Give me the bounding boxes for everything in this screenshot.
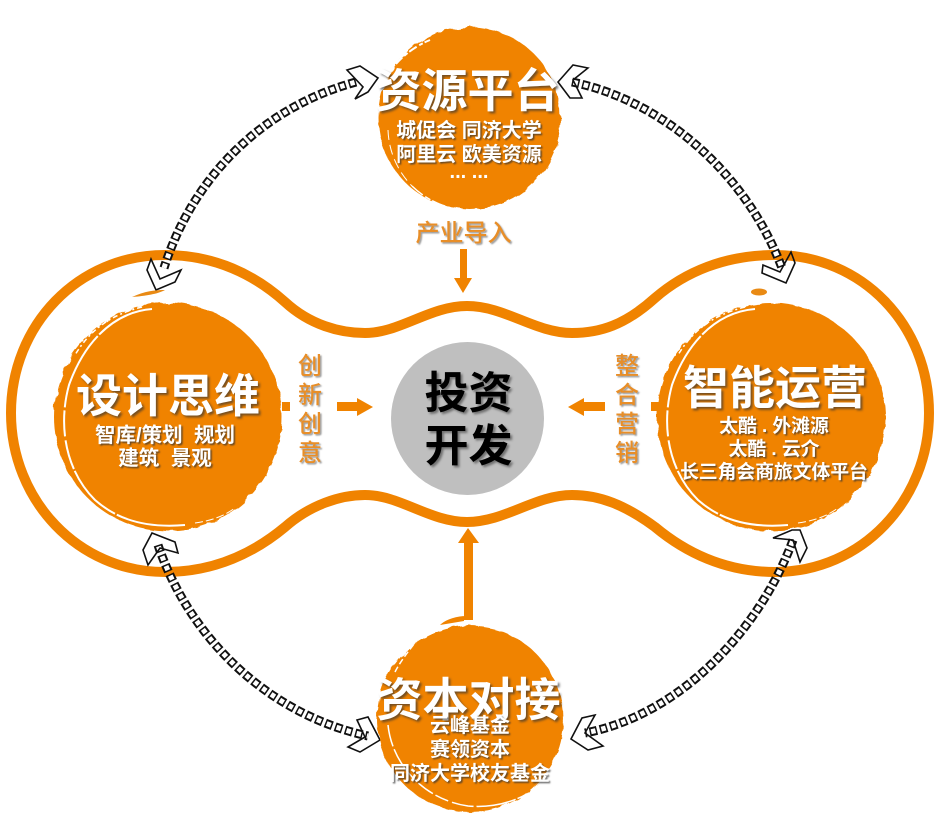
panel: smart operations	[656, 302, 886, 532]
heading: 智能运营	[683, 362, 867, 414]
icon: brush circle	[376, 624, 564, 813]
text: partners: 城促会 同济大学 阿里云 欧美资源	[396, 120, 542, 166]
orange peanut-shaped band	[11, 255, 929, 572]
chain link: top left	[164, 82, 356, 268]
icon: brush circle	[656, 302, 886, 532]
arrow: left node to centre	[282, 398, 373, 416]
arrow: right node to centre	[568, 398, 660, 416]
heading: 资本对接	[376, 674, 560, 726]
heading: investment development: 投资 开发	[424, 369, 512, 471]
chain link: bottom right	[585, 540, 793, 733]
text: funds: 云峰基金 赛领资本 同济大学校友基金	[390, 715, 550, 785]
chevrons at chain ends	[143, 65, 807, 752]
text: services: 智库/策划 规划 建筑 景观	[95, 424, 235, 470]
panel: design thinking	[52, 302, 282, 532]
text: ellipsis: ... ...	[450, 161, 488, 183]
brush marks above side circles	[132, 288, 767, 297]
arrow: down into centre	[454, 249, 472, 293]
label: creative ideas: 创 新 创 意	[298, 353, 322, 467]
icon: brush circle	[378, 26, 562, 210]
icon: brush circle	[52, 302, 282, 532]
label: industry import: 产业导入	[416, 220, 512, 247]
heading: 资源平台	[376, 65, 560, 117]
text: platforms: 太酷 . 外滩源 太酷 . 云介 长三角会商旅文体平台	[680, 415, 868, 482]
panel: resource platform	[376, 26, 562, 210]
panel: capital connection	[376, 624, 564, 813]
heading: 设计思维	[76, 370, 260, 422]
chain link: bottom left	[158, 545, 368, 736]
panel: centre circle	[391, 342, 544, 495]
arrow: up into centre	[440, 528, 479, 625]
label: integrated marketing: 整 合 营 销	[615, 353, 639, 467]
chain link: top right	[572, 82, 782, 268]
